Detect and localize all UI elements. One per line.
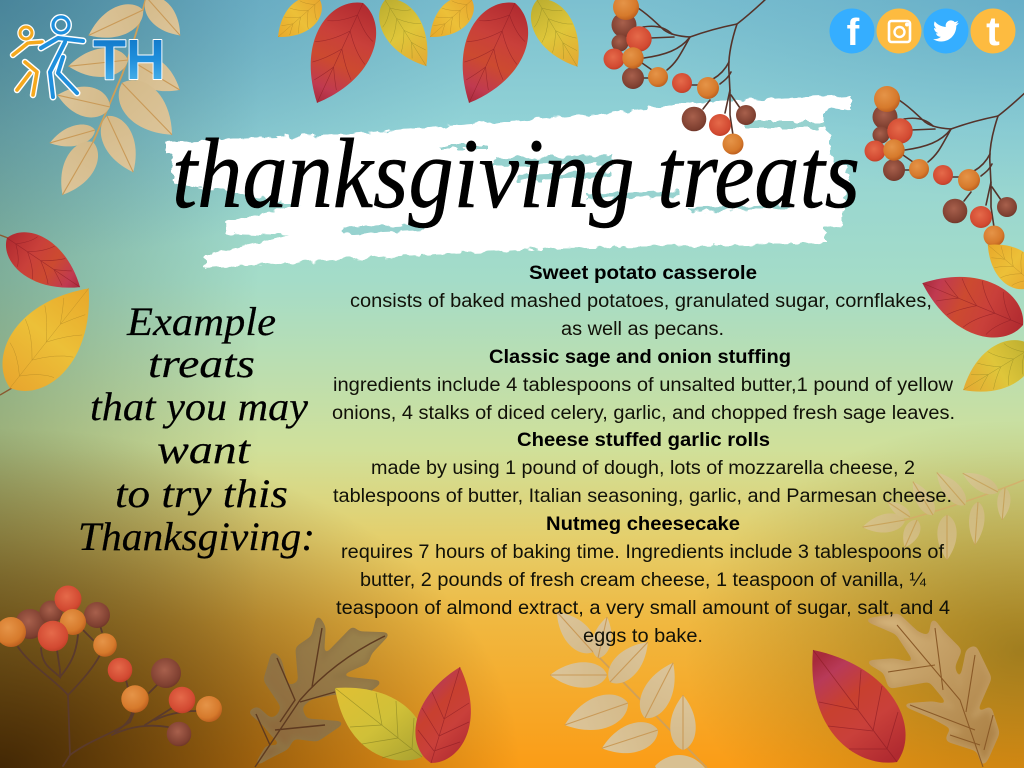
side leaves left (0, 220, 114, 408)
icon: facebook: f (847, 12, 860, 54)
treat: garlic rolls: made by using 1 pound of dough, lots of mozzarella cheese, 2 (371, 458, 915, 479)
treats description text (332, 263, 955, 647)
icon: tumblr (970, 8, 1016, 54)
treat: sage and onion stuffing: ingredients include 4 tablespoons of unsalted butter,1 pound of yellow (333, 375, 953, 396)
icon: instagram (876, 8, 922, 54)
icon: twitter (924, 8, 968, 54)
berry branch bottom left (0, 586, 222, 766)
treat: sage and onion stuffing: onions, 4 stalks of diced celery, garlic, and chopped fresh sage leaves. (332, 403, 955, 424)
red leaf bottom right (812, 650, 906, 763)
side script note: Example (126, 299, 276, 344)
social icons (830, 8, 1016, 54)
treat: sweet potato casserole: consists of baked mashed potatoes, granulated sugar, cornflakes, (350, 291, 932, 312)
side script note: treats (148, 341, 255, 386)
treat: nutmeg cheesecake (336, 514, 950, 647)
treat: sweet potato casserole (350, 263, 932, 340)
treat: nutmeg cheesecake: butter, 2 pounds of fresh cream cheese, 1 teaspoon of vanilla, ¼ (360, 570, 927, 591)
logo figure: orange (13, 27, 42, 95)
berry branch top centre (604, 0, 768, 154)
oak leaf bottom left (250, 617, 388, 767)
top hanging leaves (268, 0, 594, 115)
side script note: Thanksgiving: (78, 514, 315, 559)
icon: facebook (830, 8, 874, 54)
logo wordmark: TH (93, 28, 165, 92)
treat: sweet potato casserole: as well as pecans. (561, 319, 724, 340)
yellow-green and purple leaves bottom (335, 667, 471, 763)
logo figure: blue (41, 17, 83, 97)
treat: sage and onion stuffing (332, 347, 955, 424)
oak leaf bottom right (867, 615, 998, 767)
berry branch top right (864, 86, 1024, 246)
treat: nutmeg cheesecake: eggs to bake. (583, 626, 703, 647)
side leaves right (912, 231, 1024, 408)
white brush stroke behind title (165, 95, 852, 268)
treat: sweet potato casserole: Sweet potato casserole (529, 263, 757, 284)
beige leaf branch bottom centre (547, 603, 707, 768)
treat: garlic rolls (333, 430, 952, 507)
title: thanksgiving treats (172, 118, 860, 229)
beige leaf branch top left (47, 0, 189, 202)
treat: garlic rolls: Cheese stuffed garlic rolls (517, 430, 770, 451)
treat: nutmeg cheesecake: teaspoon of almond extract, a very small amount of sugar, salt, and 4 (336, 598, 950, 619)
beige leaf branch right (861, 466, 1024, 560)
treat: nutmeg cheesecake: Nutmeg cheesecake (546, 514, 740, 535)
side script note (78, 299, 315, 559)
icon: tumblr: t (986, 8, 1000, 54)
side script note: that you may (90, 384, 308, 429)
side script note: to try this (115, 471, 288, 516)
TH logo (13, 17, 165, 97)
treat: nutmeg cheesecake: requires 7 hours of baking time. Ingredients include 3 tablespoons of (341, 542, 945, 563)
side script note: want (157, 427, 251, 472)
treat: sage and onion stuffing: Classic sage and onion stuffing (489, 347, 791, 368)
treat: garlic rolls: tablespoons of butter, Italian seasoning, garlic, and Parmesan cheese. (333, 486, 952, 507)
